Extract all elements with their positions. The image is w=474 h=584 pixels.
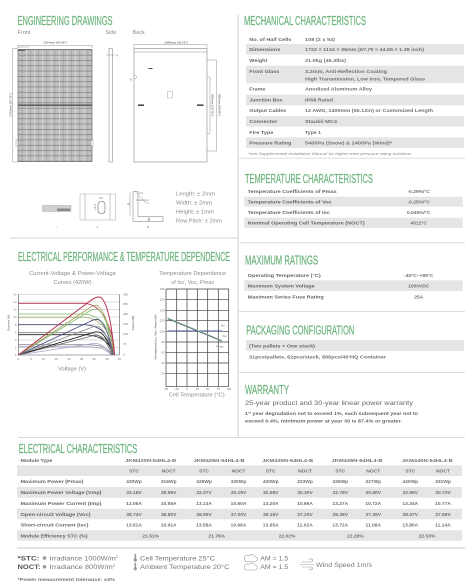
chart: IV and PV curves: 14	[13, 300, 17, 304]
mechanical table: Frame	[249, 86, 266, 92]
chart: IV and PV curves: Current-Voltage & Power-Voltage	[29, 271, 116, 277]
side view of panel	[106, 48, 118, 162]
mechanical table: Connector	[249, 119, 277, 125]
chart: temperature dependence: Cell Temperature (°C)	[169, 393, 225, 399]
electrical table: STC	[129, 468, 139, 474]
detail 3 L-profile	[127, 191, 163, 229]
electrical table: 327Wp	[365, 479, 381, 485]
chart: temperature dependence: 100	[226, 387, 232, 391]
detail 3 L-profile: 30	[147, 218, 151, 222]
irradiance text: 2	[113, 564, 115, 568]
electrical table: JKM420N-54HL4-B	[125, 458, 177, 464]
mechanical table: Staubli MC4	[305, 119, 337, 125]
chart: IV and PV curves: 30	[92, 357, 96, 361]
chart: IV and PV curves: 25	[80, 357, 83, 361]
chart: temperature dependence: Voc	[222, 334, 228, 338]
temperature table: -0.29%/°C	[408, 189, 430, 195]
air mass text: AM = 1.5	[260, 556, 289, 563]
electrical table: 10.66A	[297, 501, 313, 507]
chart: IV and PV curves: 16	[13, 292, 17, 296]
electrical table: Maximum Power (Pmax)	[20, 479, 84, 485]
electrical table: 420Wp	[126, 479, 142, 485]
electrical table: 13.06A	[126, 501, 142, 507]
electrical table	[17, 458, 462, 541]
electrical table: NOCT	[366, 468, 380, 474]
electrical table: JKM430N-54HL4-B	[262, 458, 314, 464]
electrical table: STC	[266, 468, 276, 474]
chart: temperature dependence: 20	[161, 372, 165, 376]
chart: IV and PV curves: 20	[67, 357, 71, 361]
electrical table: 22.28%	[347, 533, 364, 539]
electrical table: 29.95V	[161, 490, 177, 496]
chart: IV and PV curves: 10	[13, 315, 17, 319]
ratings table: -40°C~+85°C	[404, 273, 434, 279]
mechanical table: High Transmission, Low Iron, Tempered Glass	[305, 76, 425, 82]
chart: IV and PV curves: 280	[123, 312, 128, 316]
electrical table: 13.65A	[263, 523, 279, 529]
STC and NOCT labels	[18, 555, 40, 571]
wind speed text: Wind Speed 1m/s	[316, 562, 373, 569]
chart: IV and PV curves: 15	[54, 357, 58, 361]
electrical table: 13.72A	[332, 523, 349, 529]
chart: temperature dependence: 60	[161, 350, 165, 354]
electrical table: 30.30V	[297, 490, 313, 496]
panel: engineering drawings	[8, 14, 222, 229]
mechanical table: Output Cables	[249, 108, 287, 114]
electrical table: 30.73V	[435, 490, 451, 496]
back view of panel: 400mm (15.75")	[210, 94, 214, 116]
electrical table: Module Efficiency STC (%)	[20, 533, 88, 539]
electrical table: Short-circuit Current (Isc)	[20, 523, 89, 529]
chart: IV and PV curves: 35	[105, 357, 109, 361]
heading: maximum ratings: MAXIMUM RATINGS	[245, 254, 318, 268]
air mass text: AM = 1.5	[260, 564, 289, 571]
chart: IV and PV curves: 420	[123, 292, 128, 296]
mechanical table: 5400Pa (Snow) & 2400Pa (Wind)*	[305, 140, 392, 146]
chart: temperature dependence: 80	[161, 340, 165, 344]
chart: temperature dependence: Isc	[221, 324, 225, 328]
mechanical table: Dimensions	[249, 47, 281, 53]
electrical table: 37.20V	[297, 512, 313, 518]
detail 3 L-profile: 35	[127, 202, 131, 206]
electrical table: 13.13A	[196, 501, 212, 507]
electrical table: 39.57V	[403, 512, 419, 518]
ratings table: 1000VDC	[408, 283, 430, 289]
chart: temperature dependence: -60	[164, 387, 168, 391]
electrical table: 435Wp	[332, 479, 348, 485]
electrical table: 13.58A	[196, 523, 212, 529]
temperature text: Cell Temperature 25°C	[140, 554, 215, 562]
view labels: Front	[18, 30, 31, 36]
mechanical table: Pressure Rating	[249, 140, 291, 146]
electrical table: 30.19V	[231, 490, 247, 496]
electrical table: 32.58V	[263, 490, 279, 496]
panel: mechanical characteristics	[244, 14, 464, 156]
electrical table: NOCT	[162, 468, 176, 474]
temperature table	[244, 189, 463, 228]
temperature table: Temperature Coefficients of Voc	[248, 199, 332, 205]
chart: temperature dependence: 140	[159, 308, 165, 312]
chart: temperature dependence: 120	[159, 319, 165, 323]
electrical table: 10.60A	[231, 501, 247, 507]
view labels: Side	[106, 30, 117, 36]
temperature text: Ambient Temperature 20°C	[140, 563, 230, 571]
chart: temperature dependence: -25	[175, 387, 179, 391]
mechanical table: Fire Type	[249, 130, 274, 136]
chart: temperature dependence: 25	[196, 387, 199, 391]
electrical table: NOCT	[436, 468, 450, 474]
detail 2: 14.0	[93, 204, 97, 210]
electrical table: 10.96A	[231, 523, 247, 529]
back view of panel: 990mm (38.98")	[218, 94, 222, 116]
icon: thermometer	[134, 554, 137, 570]
chart: temperature dependence: Temperature Dependence	[159, 271, 226, 277]
electrical table: 22.02%	[279, 533, 296, 539]
chart: IV and PV curves: Current (A)	[6, 315, 10, 331]
mechanical table: 1722 × 1134 × 35mm (67.79 × 44.65 × 1.38 inch)	[305, 47, 424, 53]
electrical table: 13.51A	[126, 523, 142, 529]
warranty statement: 25-year product and 30-year linear power warranty	[245, 400, 414, 407]
legend: test conditions	[18, 554, 373, 582]
mechanical table: 21.0kg (46.3lbs)	[305, 58, 346, 64]
chart: temperature dependence: 160	[159, 298, 165, 302]
chart: IV and PV curves: 0	[15, 353, 17, 357]
chart: temperature dependence: Normalized Isc, Voc, Pmax (%)	[154, 314, 158, 360]
electrical table: 13.20A	[263, 501, 279, 507]
detail 3 L-profile: III	[147, 225, 149, 229]
chart: IV and PV curves: 0	[17, 357, 19, 361]
temperature table: Nominal Operating Cell Temperature (NOCT)	[248, 221, 365, 227]
detail 3 L-profile: 3.2	[139, 191, 144, 195]
chart: IV and PV curves: Voltage (V)	[58, 367, 86, 373]
electrical table: 425Wp	[196, 479, 212, 485]
electrical table: 10.72A	[365, 501, 382, 507]
power tolerance note: *Power measurement tolerance: ±3%	[18, 577, 115, 582]
chart: IV and PV curves: 70	[123, 342, 127, 346]
electrical table: 37.00V	[231, 512, 247, 518]
detail 1: I	[56, 225, 57, 229]
chart: IV and PV curves: 10	[42, 357, 45, 361]
electrical table: 39.36V	[333, 512, 349, 518]
chart: IV and PV curves: Curves (420W)	[54, 280, 92, 286]
ratings table: Maximum System Voltage	[248, 283, 315, 289]
heading: engineering drawings: ENGINEERING DRAWINGS	[18, 14, 112, 28]
chart: IV and PV curves: 2	[15, 346, 17, 350]
STC and NOCT labels: NOCT:	[18, 564, 40, 571]
electrical table: 13.80A	[402, 523, 419, 529]
footnote: *see Supplemental Installation Manual for higher wind pressure rating solutions	[248, 152, 411, 156]
electrical table: 430Wp	[263, 479, 279, 485]
electrical table: 30.50V	[366, 490, 382, 496]
ratings table	[244, 273, 463, 300]
chart: temperature dependence: 100	[159, 329, 165, 333]
view labels	[18, 30, 145, 36]
temperature table: 45±2°C	[411, 221, 427, 227]
irradiance text: Irradiance 800W/m	[50, 564, 105, 571]
warranty detail: st	[248, 410, 251, 414]
packaging rows: (Two pallets = One stack)	[249, 343, 315, 349]
icon: sun	[43, 556, 46, 569]
view labels: Back	[132, 30, 145, 36]
heading: temperature characteristics: TEMPERATURE CHARACTERISTICS	[245, 172, 373, 186]
temperature table: Temperature Coefficients of Pmax	[248, 189, 337, 195]
mechanical table: 108 (2 x 54)	[305, 37, 335, 43]
electrical table: JKM440N-54HL4-B	[402, 458, 453, 464]
electrical table: 10.55A	[161, 501, 177, 507]
electrical table: Maximum Power Current (Imp)	[20, 501, 102, 507]
electrical table: 32.37V	[196, 490, 212, 496]
electrical table: 10.77A	[435, 501, 451, 507]
electrical table: STC	[335, 468, 346, 474]
chart: IV and PV curves: 12	[13, 308, 17, 312]
electrical table: JKM435N-54HL4-B	[332, 458, 383, 464]
electrical table: 13.27A	[332, 501, 349, 507]
icon: wind	[300, 559, 314, 570]
tolerances: Height: ± 1mm	[176, 210, 214, 216]
chart: IV and PV curves: 140	[123, 332, 128, 336]
chart: temperature dependence: 180	[159, 287, 165, 291]
packaging rows	[246, 340, 464, 360]
electrical table: 331Wp	[435, 479, 451, 485]
electrical table: 21.76%	[208, 533, 226, 539]
electrical table: 11.02A	[297, 523, 313, 529]
electrical table: 21.51%	[142, 533, 160, 539]
tolerances	[176, 192, 222, 224]
irradiance text	[50, 555, 118, 571]
electrical table: 323Wp	[297, 479, 313, 485]
mechanical table: Type 1	[305, 130, 321, 136]
chart: IV and PV curves: 4	[15, 338, 17, 342]
electrical table: 22.53%	[419, 533, 436, 539]
irradiance text: Irradiance 1000W/m	[50, 555, 109, 562]
chart: IV and PV curves: 210	[123, 322, 128, 326]
warranty detail: year degradation not to exceed 1%, each subsequent year not to	[251, 411, 418, 417]
electrical table: 11.08A	[366, 523, 382, 529]
electrical table: JKM425N-54HL4-B	[194, 458, 245, 464]
detail 3 L-profile: Anodized	[136, 198, 149, 202]
tolerances: Row Pitch: ± 2mm	[176, 218, 222, 224]
electrical table: 38.74V	[126, 512, 142, 518]
detail 2: 9.0	[99, 196, 104, 200]
temperature table: Temperature Coefficients of Isc	[248, 210, 330, 216]
electrical table: Open-circuit Voltage (Voc)	[20, 512, 91, 518]
ratings table: Maximum Series Fuse Rating	[248, 294, 324, 300]
chart: IV and PV curves: 40	[118, 357, 121, 361]
heading: electrical performance: ELECTRICAL PERFORMANCE & TEMPERATURE DEPENDENCE	[18, 250, 230, 264]
irradiance text: 2	[116, 555, 118, 559]
mechanical table	[246, 37, 464, 148]
icon: cloud	[244, 554, 257, 570]
electrical table: NOCT	[298, 468, 312, 474]
chart: temperature dependence: 0	[186, 387, 188, 391]
back view of panel	[130, 40, 222, 162]
chart: IV and PV curves: 6	[15, 330, 17, 334]
front view of panel	[8, 40, 93, 162]
electrical table: 39.16V	[263, 512, 279, 518]
electrical table: 37.39V	[366, 512, 382, 518]
chart: temperature dependence	[154, 271, 232, 399]
ratings table: Operating Temperature (°C)	[248, 273, 321, 279]
heading: warranty: WARRANTY	[245, 383, 289, 397]
front view of panel: 1134mm (44.65")	[43, 40, 67, 44]
mechanical table: No. of Half Cells	[249, 37, 292, 43]
heading: mechanical characteristics: MECHANICAL CHARACTERISTICS	[244, 14, 366, 28]
chart: temperature dependence: 50	[206, 387, 210, 391]
mechanical table: 12 AWG, 1400mm (55.12in) or Customized Length	[305, 108, 433, 114]
warranty detail: exceed 0.4%, minimum power at year 30 is 87.4% or greater.	[245, 418, 403, 424]
mechanical table: Junction Box	[249, 98, 283, 104]
mechanical table: Front Glass	[249, 69, 280, 75]
chart: temperature dependence: 75	[217, 387, 220, 391]
temperature table: -0.25%/°C	[408, 199, 430, 205]
electrical table: STC	[199, 468, 209, 474]
tolerances: Width: ± 2mm	[176, 200, 212, 206]
chart: IV and PV curves: 8	[15, 323, 17, 327]
air mass text	[260, 556, 289, 571]
chart: temperature dependence: Pmax	[216, 344, 224, 348]
electrical table: 32.78V	[333, 490, 349, 496]
mechanical table: IP68 Rated	[305, 98, 333, 104]
chart: IV and PV curves: 350	[123, 302, 128, 306]
packaging rows: 31pcs/pallets, 62pcs/stack, 806pcs/40'HQ Container	[249, 354, 386, 360]
tolerances: Length: ± 2mm	[176, 192, 215, 198]
electrical table: 320Wp	[231, 479, 246, 485]
panel: packaging configuration	[246, 324, 464, 360]
temperature text	[140, 554, 230, 571]
chart: IV and PV curves: 0	[123, 352, 125, 356]
heading: electrical characteristics: ELECTRICAL CHARACTERISTICS	[19, 442, 137, 456]
electrical table: 11.14A	[435, 523, 451, 529]
mechanical table: 3.2mm, Anti-Reflection Coating	[305, 69, 387, 75]
chart: temperature dependence: of Isc, Voc, Pmax	[171, 280, 214, 286]
electrical table: Module Type	[20, 458, 53, 464]
mechanical table: Weight	[249, 58, 268, 64]
chart: IV and PV curves: 5	[30, 357, 32, 361]
mechanical table: Anodized Aluminum Alloy	[305, 86, 372, 92]
chart: IV and PV curves: Power (W)	[131, 316, 135, 330]
back view of panel: B	[130, 78, 132, 82]
STC and NOCT labels: *STC:	[18, 555, 40, 562]
electrical table: 440Wp	[402, 479, 418, 485]
detail 2: II	[97, 225, 98, 229]
electrical table: 32.99V	[403, 490, 419, 496]
electrical table: NOCT	[232, 468, 245, 474]
front view of panel: 1722mm (67.79")	[8, 93, 12, 117]
panel: electrical characteristics	[17, 442, 465, 549]
back view of panel: 1086mm (42.76")	[164, 40, 188, 44]
warranty detail: 1	[245, 412, 248, 417]
temperature table: 0.045%/°C	[407, 210, 431, 216]
electrical table: STC	[405, 468, 416, 474]
chart: IV and PV curves	[6, 271, 135, 373]
panel: warranty	[245, 383, 418, 424]
electrical table: 32.16V	[126, 490, 142, 496]
electrical table: 10.91A	[161, 523, 177, 529]
electrical table: 13.34A	[402, 501, 419, 507]
detail 1	[42, 206, 71, 229]
panel: electrical performance and temperature dependence	[6, 250, 232, 399]
panel: maximum ratings	[244, 254, 463, 300]
panel: temperature characteristics	[244, 172, 463, 228]
electrical table: Maximum Power Voltage (Vmp)	[20, 490, 102, 496]
electrical table: 38.95V	[196, 512, 212, 518]
side view of panel: H	[116, 54, 118, 58]
electrical table: 36.80V	[161, 512, 177, 518]
detail 2	[80, 194, 116, 229]
warranty detail	[245, 410, 418, 424]
electrical table: 316Wp	[161, 479, 177, 485]
ratings table: 25A	[414, 294, 424, 300]
electrical table: 37.59V	[435, 512, 451, 518]
heading: packaging configuration: PACKAGING CONFIGURATION	[246, 324, 354, 338]
chart: temperature dependence: 40	[161, 361, 165, 365]
